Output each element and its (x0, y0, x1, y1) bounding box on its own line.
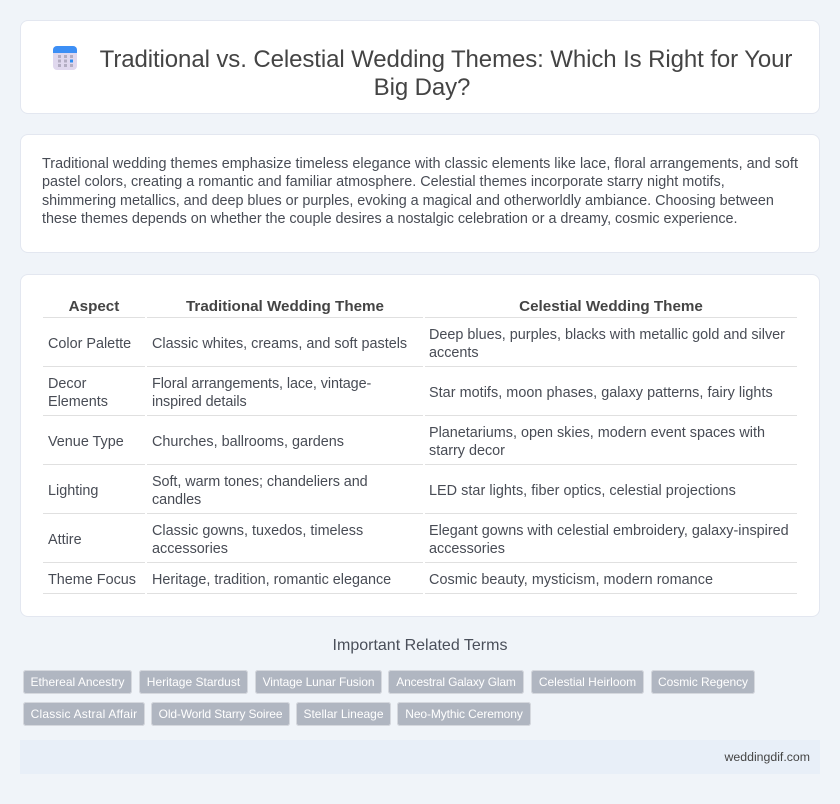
row: theme focus: Theme Focus (48, 572, 136, 588)
row: attire: accessories (152, 541, 228, 557)
tag: Old-World Starry Soiree (159, 707, 282, 721)
row: decor elements: inspired details (152, 394, 247, 410)
row: venue type: starry decor (429, 443, 505, 459)
row: decor elements: Elements (48, 394, 108, 410)
header card (20, 20, 820, 114)
row: color palette: Classic whites, creams, and soft pastels (152, 336, 407, 352)
row: decor elements: Star motifs, moon phases, galaxy patterns, fairy lights (429, 385, 773, 401)
tag: Vintage Lunar Fusion (263, 675, 374, 689)
row: venue type: Churches, ballrooms, gardens (152, 434, 344, 450)
tag: Ethereal Ancestry (30, 675, 125, 689)
row: lighting: Lighting (48, 483, 98, 499)
intro text (42, 156, 798, 227)
row: decor elements (48, 376, 773, 410)
related terms heading: Important Related Terms (333, 637, 507, 654)
header: celestial: Celestial Wedding Theme (519, 298, 703, 315)
row: attire (48, 523, 789, 557)
title (100, 46, 792, 101)
tag (397, 702, 531, 726)
row: venue type: Venue Type (48, 434, 124, 450)
header: aspect: Aspect (69, 298, 119, 315)
tag (531, 670, 644, 694)
intro text: these themes depends on whether the couple desires a nostalgic celebration or a dreamy, cosmic experience. (42, 211, 737, 227)
row: venue type (48, 425, 765, 459)
row: attire: accessories (429, 541, 505, 557)
related terms tags (23, 670, 755, 726)
row: attire: Classic gowns, tuxedos, timeless (152, 523, 363, 539)
row: color palette: accents (429, 345, 479, 361)
row: color palette (48, 327, 785, 361)
row: decor elements: Decor (48, 376, 86, 392)
row: lighting: candles (152, 492, 201, 508)
row: attire: Attire (48, 532, 82, 548)
footer source: weddingdif.com (725, 750, 810, 764)
tag (23, 702, 145, 726)
row: lighting (48, 474, 736, 508)
tag: Cosmic Regency (658, 675, 748, 689)
panel: comparison table (20, 274, 820, 617)
tag (151, 702, 290, 726)
row: theme focus (48, 572, 713, 588)
row: attire: Elegant gowns with celestial embroidery, galaxy-inspired (429, 523, 789, 539)
row: theme focus: Heritage, tradition, romantic elegance (152, 572, 391, 588)
tag (388, 670, 524, 694)
row: theme focus: Cosmic beauty, mysticism, modern romance (429, 572, 713, 588)
tag (255, 670, 382, 694)
intro text: shimmering metallics, and deep blues or purples, evoking a magical and otherworldly ambiance. Choosing between (42, 193, 774, 209)
tag: Neo-Mythic Ceremony (405, 707, 523, 721)
row: lighting: Soft, warm tones; chandeliers and (152, 474, 368, 490)
footer (20, 740, 820, 774)
tag (651, 670, 755, 694)
tag (139, 670, 248, 694)
intro text: Traditional wedding themes emphasize timeless elegance with classic elements like lace, floral arrangements, and soft (42, 156, 798, 172)
tag: Stellar Lineage (303, 707, 384, 721)
row: color palette: Deep blues, purples, blacks with metallic gold and silver (429, 327, 785, 343)
icon: calendar (53, 46, 77, 70)
header: traditional: Traditional Wedding Theme (186, 298, 384, 315)
title: Big Day? (374, 74, 470, 101)
tag: Classic Astral Affair (31, 707, 137, 721)
row: decor elements: Floral arrangements, lace, vintage- (152, 376, 371, 392)
tag (23, 670, 132, 694)
intro text: pastel colors, creating a romantic and familiar atmosphere. Celestial themes incorporate starry night motifs, (42, 174, 725, 190)
row: lighting: LED star lights, fiber optics, celestial projections (429, 483, 736, 499)
tag: Celestial Heirloom (539, 675, 636, 689)
title: Traditional vs. Celestial Wedding Themes: Which Is Right for Your (100, 46, 792, 73)
row: venue type: Planetariums, open skies, modern event spaces with (429, 425, 765, 441)
table header (69, 298, 703, 315)
tag: Ancestral Galaxy Glam (396, 675, 516, 689)
panel: intro (20, 134, 820, 253)
tag: Heritage Stardust (147, 675, 240, 689)
row: color palette: Color Palette (48, 336, 131, 352)
tag (296, 702, 391, 726)
